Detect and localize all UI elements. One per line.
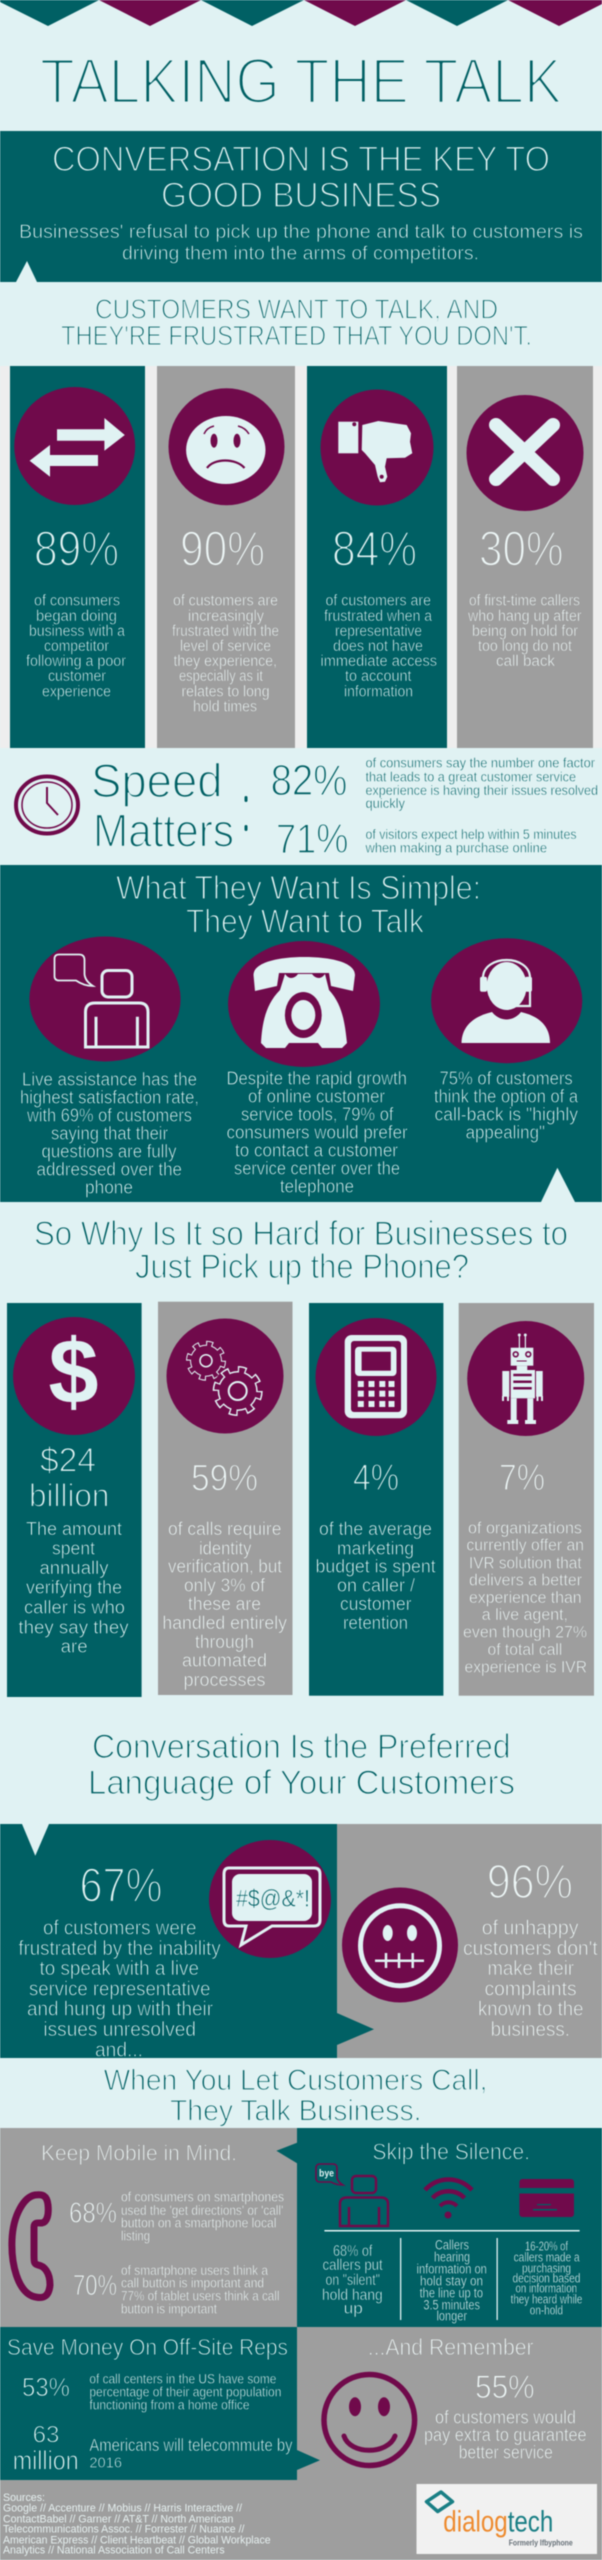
icon: swearing speech bubble: #$@&*! (236, 1886, 310, 1913)
text: relates to long (182, 684, 270, 701)
panel: frustration stats (0, 366, 602, 748)
icon: X mark (466, 395, 584, 511)
text (162, 1519, 287, 1690)
text: hang up: callers put (322, 2257, 383, 2274)
text: on caller / (337, 1576, 415, 1596)
heading: preferred language (88, 1728, 515, 1802)
text: make their (488, 1958, 574, 1980)
text (463, 1917, 598, 2041)
text: especially as it (179, 668, 264, 685)
stat $24 billion (29, 1442, 109, 1514)
text: frustrated by the inability (18, 1938, 221, 1960)
text: hang up: on "silent" (326, 2272, 380, 2289)
heading: so why is it so hard: Just Pick up the Phone? (135, 1248, 469, 1286)
heading (116, 869, 481, 940)
sources: Sources: (3, 2492, 45, 2504)
text: live assistance: questions are fully (42, 1142, 176, 1162)
text: experience (42, 684, 111, 701)
text: hold information (416, 2237, 487, 2324)
icon: gritted teeth face (342, 1888, 458, 2002)
stat 63 million: million (13, 2445, 79, 2475)
text: retention (343, 1613, 408, 1633)
text: issues unresolved (43, 2019, 196, 2041)
stat 63 million: 63 (33, 2421, 60, 2448)
icon: switching arrows (14, 387, 135, 505)
text: purchasing decision: purchasing (522, 2261, 571, 2275)
text: spent (52, 1538, 95, 1558)
intro heading (52, 139, 550, 215)
card: 30% (457, 366, 593, 748)
stat $24 billion: $24 (40, 1442, 96, 1480)
stat 96%: 96% (487, 1856, 573, 1909)
text: caller is who (24, 1597, 125, 1617)
text: call-back: appealing" (466, 1122, 545, 1142)
text: rotary: of online customer (248, 1086, 385, 1106)
text: live assistance: addressed over the (36, 1160, 182, 1180)
text: hold information: the line up to (420, 2285, 483, 2300)
sources: Analytics // National Association of Call Centers (3, 2544, 225, 2556)
text: call-back: think the option of a (434, 1086, 579, 1106)
text: The amount (26, 1519, 122, 1539)
text: these are (188, 1594, 261, 1614)
text (463, 1518, 587, 1676)
intro heading: GOOD BUSINESS (161, 175, 441, 215)
colon dots (244, 796, 248, 831)
text: automated (182, 1651, 267, 1671)
text (424, 2407, 587, 2462)
panel: skip the silence (276, 2128, 602, 2327)
text: live assistance: highest satisfaction rate, (20, 1088, 199, 1108)
footer gray background (0, 2327, 602, 2560)
text 68% (121, 2190, 284, 2244)
card: 4% (309, 1303, 443, 1696)
text: live assistance (20, 1070, 199, 1198)
text: customer (340, 1594, 412, 1614)
icon: headset agent (431, 938, 582, 1063)
text: identity (199, 1538, 251, 1558)
text: of the average (319, 1519, 432, 1539)
text: experience is IVR (464, 1657, 587, 1676)
text: purchasing decision: 16-20% of (525, 2240, 568, 2254)
text (172, 593, 279, 716)
text: known to the (478, 1999, 584, 2021)
heading: ...And Remember (368, 2334, 534, 2360)
text: of customers are (326, 593, 431, 610)
text: call back (496, 653, 555, 670)
heading: speed matters: Speed (91, 754, 223, 807)
text: hang up: hold hang (322, 2287, 383, 2304)
text: purchasing decision: decision based (512, 2272, 580, 2286)
panel: 96% unhappy (337, 1824, 602, 2058)
text: hang up: 68% of (333, 2243, 373, 2260)
panel: and remember (324, 2334, 587, 2466)
stat 53%: 53% (22, 2372, 70, 2402)
text: verifying the (26, 1577, 122, 1597)
text: purchasing decision: they heard while (511, 2292, 582, 2306)
text: purchasing decision: on information (516, 2282, 577, 2296)
icon: logo speech bubble (426, 2492, 452, 2512)
heading: Keep Mobile in Mind. (41, 2141, 237, 2166)
card: 59% (158, 1302, 292, 1695)
panel: save money (0, 2327, 320, 2480)
text: rotary: to contact a customer (235, 1141, 398, 1161)
text: budget is spent (316, 1557, 436, 1577)
text: hold times (193, 698, 257, 716)
icon: signal (425, 2180, 472, 2218)
text: they experience, (174, 653, 277, 670)
text: of consumers (34, 593, 120, 610)
text: following a poor (26, 653, 126, 670)
text: better service (459, 2442, 553, 2462)
text: rotary: telephone (280, 1177, 354, 1197)
stat 59%: 59% (191, 1457, 258, 1499)
heading: so why is it so hard (34, 1215, 568, 1286)
text: processes (184, 1670, 266, 1690)
text 68%: button on a smartphone local (121, 2216, 276, 2231)
icon: sad face (168, 388, 284, 505)
stat 84%: 84% (332, 523, 417, 577)
heading: Skip the Silence. (372, 2138, 530, 2164)
stat 63 million (13, 2421, 79, 2475)
card: 7% (459, 1303, 594, 1696)
panel: 67% frustrated (0, 1824, 337, 2062)
text: live assistance: saying that their (51, 1124, 168, 1144)
stat 67%: 67% (80, 1860, 162, 1913)
text: hold information: 3.5 minutes (423, 2297, 480, 2312)
heading: What They Want Is Simple: (116, 869, 481, 906)
text: hang up (322, 2243, 383, 2318)
text: and... (95, 2040, 143, 2062)
icon: person with speech bubble (29, 936, 181, 1062)
text 68%: used the 'get directions' or 'call' (121, 2203, 283, 2218)
heading: customers want to talk: THEY'RE FRUSTRATED THAT YOU DON'T. (61, 320, 532, 351)
text: information (344, 684, 413, 701)
text: level of service (180, 638, 271, 655)
text 68%: listing (121, 2229, 150, 2244)
heading: speed matters: Matters (93, 805, 234, 857)
text 53%: of call centers in the US have some (89, 2371, 276, 2386)
text: of total call (488, 1640, 562, 1659)
text (18, 1917, 221, 2062)
text 70%: call button is important and (121, 2275, 264, 2290)
text: of customers were (43, 1917, 196, 1939)
heading: Save Money On Off-Site Reps (7, 2334, 288, 2360)
text 71%: of visitors expect help within 5 minutes (366, 827, 577, 842)
text: immediate access (320, 653, 437, 670)
stat $24 billion: billion (29, 1478, 109, 1514)
heading: when you let customers call: When You Let Customers Call, (104, 2064, 487, 2097)
text: hold information: hearing (434, 2250, 470, 2265)
text: to account (345, 668, 412, 685)
text 71%: when making a purchase online (365, 840, 547, 855)
heading: when you let customers call: They Talk Business. (170, 2095, 422, 2128)
sources: Google // Accenture // Mobius // Harris Interactive // (3, 2503, 243, 2515)
text: rotary: Despite the rapid growth (226, 1068, 407, 1088)
text: purchasing decision: on-hold (530, 2303, 563, 2317)
text 70%: 77% of tablet users think a call (121, 2289, 280, 2304)
stat 7%: 7% (499, 1456, 545, 1498)
intro heading: CONVERSATION IS THE KEY TO (52, 139, 550, 179)
text 70% (121, 2263, 280, 2316)
text: hang up: up (344, 2300, 363, 2318)
text: competitor (44, 638, 109, 655)
stat 89%: 89% (34, 523, 119, 577)
text: through (195, 1632, 254, 1652)
text (26, 593, 126, 701)
text: who hang up after (467, 608, 582, 625)
text: even though 27% (463, 1622, 587, 1641)
icon: gears (166, 1318, 284, 1434)
icon: rotary telephone (228, 941, 380, 1067)
stat 71%: 71% (276, 815, 348, 862)
heading: preferred language: Conversation Is the Preferred (92, 1728, 511, 1766)
stat 82%: 82% (271, 756, 347, 805)
intro text: driving them into the arms of competitors. (122, 242, 479, 264)
text 82%: quickly (366, 796, 405, 811)
text 82% (366, 756, 598, 811)
stat 55%: 55% (475, 2369, 535, 2405)
text: live assistance: Live assistance has the (22, 1070, 197, 1090)
text: rotary: service tools, 79% of (241, 1104, 394, 1124)
logo wordmark: tech (508, 2506, 553, 2539)
text: live assistance: with 69% of customers (26, 1106, 192, 1126)
text: business. (491, 2019, 570, 2041)
text: rotary: service center over the (234, 1159, 400, 1179)
text: annually (40, 1558, 108, 1578)
heading: when you let customers call (104, 2064, 487, 2128)
icon: smiley (324, 2374, 415, 2466)
icon: person hanging up: bye (319, 2169, 334, 2180)
icon: clock (16, 776, 78, 834)
text: purchasing decision: callers made a (514, 2251, 580, 2265)
text: customers don't (463, 1938, 598, 1960)
text: marketing (337, 1538, 414, 1558)
stat 4%: 4% (353, 1456, 399, 1498)
text: of first-time callers (469, 593, 580, 610)
text 70%: of smartphone users think a (121, 2263, 268, 2278)
logo: dialogtech (416, 2484, 597, 2554)
icon: dollar sign: $ (48, 1321, 98, 1423)
text: only 3% of (184, 1576, 266, 1596)
icon: phone handset (12, 2195, 50, 2298)
text: frustrated with the (172, 623, 279, 640)
sources: Telecommunications Assoc. // Forrester // Nuance // (3, 2524, 245, 2536)
text: IVR solution that (469, 1553, 582, 1572)
panel: speed matters (16, 754, 598, 862)
panel: intro (0, 131, 602, 282)
text: of unhappy (482, 1917, 578, 1939)
text: of calls require (168, 1519, 281, 1539)
heading: so why is it so hard: So Why Is It so Hard for Businesses to (34, 1215, 568, 1253)
text: call-back (434, 1068, 579, 1142)
logo tagline: Formerly Ifbyphone (509, 2539, 573, 2548)
text: a live agent, (482, 1605, 568, 1624)
text: does not have (333, 638, 423, 655)
text: pay extra to guarantee (424, 2425, 587, 2445)
text: rotary (226, 1068, 408, 1197)
text 63 million (89, 2435, 293, 2471)
text: business with a (29, 623, 125, 640)
heading: preferred language: Language of Your Customers (88, 1764, 515, 1802)
text (320, 593, 437, 701)
text 53%: percentage of their agent population (89, 2385, 281, 2400)
heading: customers want to talk: CUSTOMERS WANT TO TALK, AND (95, 294, 498, 324)
card: 90% (157, 366, 295, 748)
text: of customers would (435, 2407, 576, 2427)
text 82%: that leads to a great customer service (366, 770, 576, 785)
sources: American Express // Client Heartbeat // Global Workplace (3, 2534, 271, 2546)
text: live assistance: phone (85, 1178, 133, 1198)
text: verification, but (168, 1557, 282, 1577)
text: currently offer an (466, 1536, 584, 1555)
text (18, 1519, 129, 1657)
dividers (324, 2230, 580, 2320)
text: purchasing decision (511, 2240, 582, 2317)
text 53% (89, 2371, 281, 2412)
icon: thumbs down (320, 390, 434, 506)
sources (3, 2492, 271, 2556)
card: 84% (307, 366, 447, 748)
text (316, 1519, 436, 1633)
text: frustrated when a (324, 608, 432, 625)
text 82%: of consumers say the number one factor (366, 756, 595, 771)
text: handled entirely (162, 1613, 287, 1633)
text: customer (48, 668, 106, 685)
text: complaints (484, 1979, 577, 2001)
text: and hung up with their (27, 1999, 213, 2021)
text: delivers a better (469, 1571, 582, 1590)
panel: keep mobile in mind (0, 2128, 297, 2327)
card: 89% (10, 366, 145, 748)
text: experience than (469, 1588, 582, 1607)
text: to speak with a live (40, 1958, 199, 1980)
text 68%: of consumers on smartphones (121, 2190, 284, 2205)
text: began doing (36, 608, 117, 625)
icon: swearing speech bubble (209, 1840, 331, 1958)
text 63 million: 2016 (89, 2454, 122, 2471)
icon: calculator phone (316, 1318, 436, 1436)
icon: dollar sign (13, 1317, 135, 1435)
text: of customers are (173, 593, 278, 610)
heading: speed matters (91, 754, 234, 857)
text: call-back: 75% of customers (440, 1068, 573, 1088)
text: of organizations (468, 1518, 582, 1537)
panel: what they want (0, 865, 602, 1202)
icon: robot (467, 1321, 584, 1436)
stat 68%: 68% (69, 2198, 117, 2230)
text: hold information: hold stay on (420, 2273, 483, 2288)
text 53%: functioning from a home office (89, 2397, 250, 2412)
text: increasingly (188, 608, 264, 625)
card: $24 billion (7, 1303, 142, 1697)
intro text (19, 221, 583, 264)
heading: They Want to Talk (186, 903, 424, 940)
text (467, 593, 582, 670)
text: hold information: Callers (435, 2237, 469, 2252)
text 70%: button is important (121, 2301, 217, 2316)
heading: customers want to talk (61, 294, 532, 351)
text: call-back: call-back is "highly (434, 1104, 578, 1124)
text: representative (335, 623, 422, 640)
text: hold information: information on (416, 2261, 487, 2276)
text: they say they (18, 1617, 129, 1637)
icon: person hanging up (316, 2164, 388, 2226)
icon: credit card (519, 2179, 574, 2217)
text 63 million: Americans will telecommute by (89, 2435, 293, 2455)
text: being on hold for (472, 623, 578, 640)
intro text: Businesses' refusal to pick up the phone and talk to customers is (19, 221, 583, 243)
sources: ContactBabel // Garner // AT&T // North American (3, 2513, 233, 2525)
logo wordmark: dialog (443, 2506, 508, 2539)
text: too long do not (478, 638, 573, 655)
text: rotary: consumers would prefer (226, 1122, 408, 1142)
panel: barriers stats (7, 1302, 594, 1697)
stat 30%: 30% (479, 523, 564, 577)
text: hold information: longer (436, 2309, 467, 2324)
text: are (61, 1637, 88, 1657)
stat 90%: 90% (180, 523, 265, 577)
zigzag header banner (0, 0, 602, 26)
text: service representative (29, 1979, 210, 2001)
text 71% (365, 827, 577, 855)
stat 70%: 70% (73, 2270, 117, 2302)
